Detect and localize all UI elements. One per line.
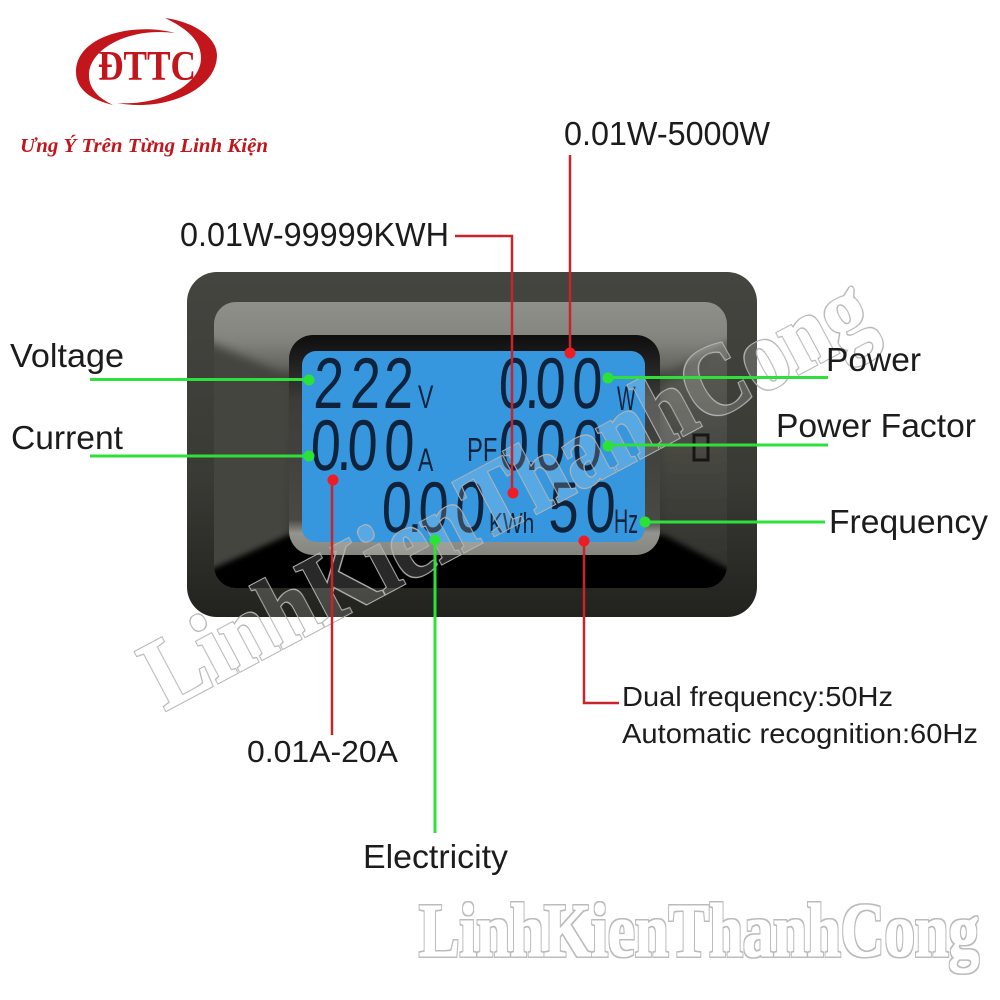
logo lettering: ĐTTC (98, 44, 196, 90)
callout: power factor line (608, 444, 828, 446)
label: energy range: 0.01W-99999KWH (180, 216, 449, 253)
dot: voltage (304, 374, 314, 386)
label: frequency note line 1: Dual frequency:50Hz (622, 681, 893, 712)
side indicator (694, 435, 708, 460)
dot: frequency note (578, 536, 590, 546)
front plate faces (214, 302, 727, 588)
logo swoosh: right arc (117, 18, 217, 105)
current readout: 0.00 (309, 406, 416, 486)
label: power factor: Power Factor (776, 407, 976, 444)
unit W: W (617, 379, 636, 417)
energy readout: 0.00 (380, 468, 487, 548)
callout: current line (90, 454, 309, 458)
watermark: bottom: LinhKienThanhCong (419, 888, 979, 973)
label: frequency note line 2: Automatic recognition:60Hz (622, 718, 978, 749)
callout: power line (608, 376, 828, 379)
red dots (328, 348, 590, 546)
front plate: bottom face (214, 532, 727, 588)
green dots (304, 372, 650, 546)
label: current range: 0.01A-20A (247, 734, 398, 769)
label: frequency: Frequency (829, 503, 988, 540)
callout: frequency note line (584, 541, 619, 703)
dot: power range (564, 348, 576, 358)
callout: current range line (331, 480, 333, 735)
dot: current range (328, 474, 338, 486)
label: power range: 0.01W-5000W (564, 115, 771, 152)
watermark: diagonal: LinhKienThanhCong (124, 254, 889, 731)
unit V: V (418, 379, 434, 415)
front plate: right face (660, 346, 727, 552)
label: voltage: Voltage (10, 337, 124, 374)
callout: voltage line (90, 378, 309, 381)
logo swoosh: left arc (76, 29, 175, 105)
labels (10, 115, 988, 875)
label: current: Current (11, 419, 123, 456)
dot: electricity (430, 534, 440, 546)
power meter device (187, 272, 757, 617)
label: electricity: Electricity (363, 838, 509, 875)
label: power: Power (826, 341, 921, 378)
dot: current (304, 450, 314, 462)
dot: power factor (602, 440, 614, 452)
slogan: Ưng Ý Trên Từng Linh Kiện (20, 134, 268, 157)
power readout: 0.00 (497, 344, 604, 424)
frequency readout: 50 (547, 468, 617, 548)
callout: electricity line (434, 540, 436, 833)
front plate: top face (214, 302, 727, 376)
lcd frame (289, 335, 660, 555)
dot: frequency (640, 516, 650, 528)
power factor readout: 0.00 (497, 406, 604, 486)
voltage readout: 222 (312, 344, 415, 424)
lcd screen (302, 351, 645, 542)
logo: DTTC (76, 18, 217, 105)
unit KWh: KWh (489, 508, 534, 540)
unit Hz: Hz (614, 502, 638, 540)
unit A: A (418, 442, 434, 478)
red callouts (332, 155, 619, 735)
front plate: left face (214, 406, 289, 569)
dot: power (602, 372, 614, 384)
dot: energy range (508, 488, 518, 498)
green callouts (90, 378, 828, 833)
callout: power range line (569, 155, 571, 352)
unit PF: PF (467, 432, 497, 469)
callout: energy range line (455, 236, 512, 493)
device body (187, 272, 757, 617)
callout: frequency line (645, 520, 825, 524)
